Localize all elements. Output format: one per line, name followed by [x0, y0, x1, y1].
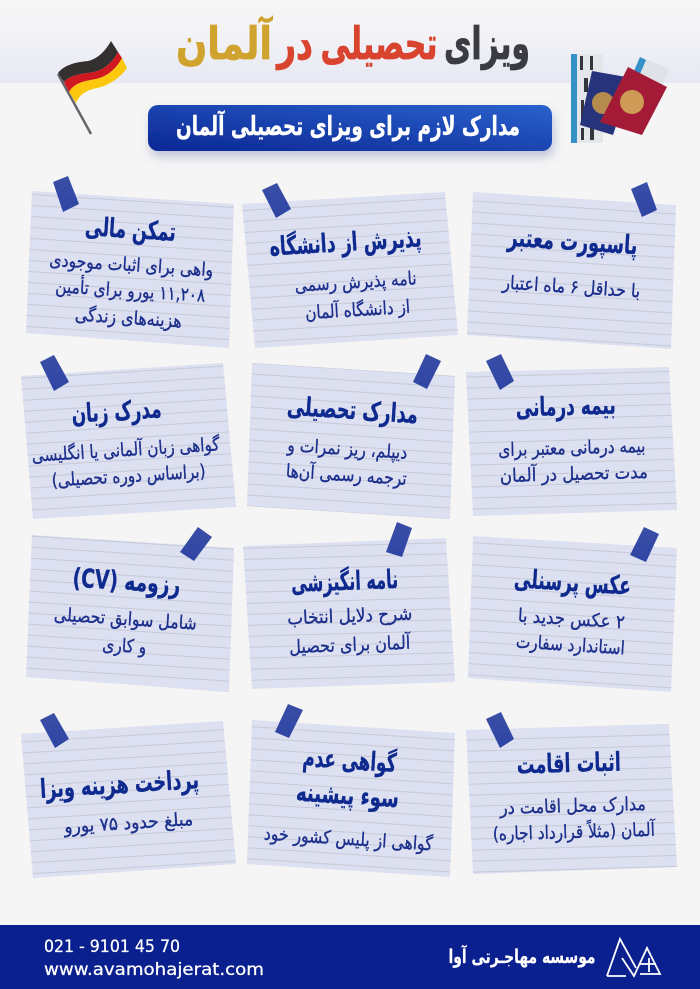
panel: financial means: ۱۱,۲۰۸ یورو برای تأمین [55, 273, 206, 307]
panel: proof of residence [466, 712, 677, 874]
panel: proof of residence: مدارک محل اقامت در [499, 794, 646, 819]
panel: resume: و کاری [102, 635, 147, 658]
company name: موسسه مهاجـرتی آوا [448, 944, 596, 968]
panel: visa fee: مبلغ حدود ۷۵ یورو [63, 809, 194, 838]
panel: personal photo [468, 527, 677, 692]
logo [607, 939, 660, 976]
panel: language certificate: مدرک زبان [71, 394, 162, 430]
panel: university admission: پذیرش از دانشگاه [269, 222, 422, 263]
phone number: 021 - 9101 45 70 [44, 937, 180, 957]
panel: health insurance: بیمه درمانی [515, 391, 616, 423]
panel: resume: شامل سوابق تحصیلی [53, 604, 197, 635]
panel: language certificate [21, 355, 236, 519]
panel: university admission: از دانشگاه آلمان [304, 295, 411, 324]
panel: clean criminal record: گواهی عدم [302, 742, 398, 779]
panel: health insurance: مدت تحصیل در آلمان [500, 460, 648, 487]
panel: financial means [26, 176, 234, 348]
title: ویزای [444, 17, 530, 70]
panel: clean criminal record: گواهی از پلیس کشور خود [263, 823, 434, 855]
panel: visa fee [21, 713, 236, 878]
panel: personal photo: استاندارد سفارت [515, 632, 625, 660]
panel: motivation letter [243, 522, 455, 689]
panel: motivation letter: شرح دلایل انتخاب [287, 604, 413, 629]
panel: health insurance: بیمه درمانی معتبر برای [498, 436, 646, 461]
subtitle banner [148, 105, 552, 151]
panel: proof of residence: اثبات اقامت [516, 748, 621, 780]
panel: personal photo: ۲ عکس جدید با [517, 606, 625, 633]
title: آلمان [176, 16, 273, 70]
title: تحصیلی [320, 17, 438, 70]
panel: proof of residence: آلمان (مثلاً قرارداد اجاره) [493, 817, 656, 845]
website: www.avamohajerat.com [44, 960, 264, 980]
panel: language certificate: (براساس دوره تحصیلی) [51, 461, 206, 492]
panel: clean criminal record: سوء پیشینه [295, 778, 400, 814]
panel: resume: رزومه (CV) [72, 564, 181, 600]
panel: financial means: هزینه‌های زندگی [74, 304, 182, 332]
panel: language certificate: گواهی زبان آلمانی یا انگلیسی [31, 432, 220, 467]
panel: passport: پاسپورت معتبر [505, 223, 638, 261]
panel: financial means: تمکن مالی [84, 212, 177, 248]
panel: clean criminal record [247, 704, 455, 877]
title: در [276, 17, 313, 70]
panel: university admission: نامه پذیرش رسمی [294, 268, 417, 297]
icon: passports and tickets [571, 54, 670, 143]
title [176, 16, 530, 70]
panel: health insurance [466, 354, 677, 516]
panel: resume [26, 527, 234, 692]
panel: university admission [242, 183, 458, 348]
panel: academic documents [247, 354, 455, 519]
footer [0, 925, 700, 989]
panel: motivation letter: نامه انگیزشی [291, 564, 399, 599]
panel: academic documents: دیپلم، ریز نمرات و [286, 435, 408, 464]
panel: passport: با حداقل ۶ ماه اعتبار [501, 273, 641, 302]
panel: financial means: واهی برای اثبات موجودی [49, 250, 214, 281]
panel: motivation letter: آلمان برای تحصیل [289, 631, 411, 658]
panel: academic documents: ترجمه رسمی آن‌ها [285, 459, 408, 490]
subtitle banner: مدارک لازم برای ویزای تحصیلی آلمان [176, 110, 520, 142]
panel: academic documents: مدارک تحصیلی [286, 392, 419, 430]
panel: visa fee: پرداخت هزینه ویزا [39, 765, 200, 805]
icon: German flag [58, 41, 127, 134]
panel: personal photo: عکس پرسنلی [513, 564, 632, 602]
panel: passport [467, 182, 676, 349]
